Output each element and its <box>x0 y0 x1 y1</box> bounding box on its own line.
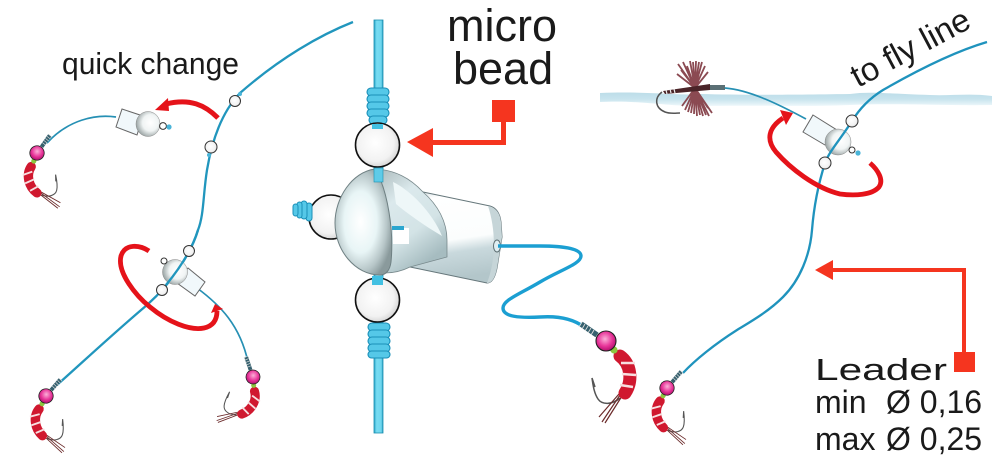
to fly line label: to fly line <box>844 0 976 94</box>
left rig main line <box>57 22 353 385</box>
quick change label: quick change <box>62 46 239 81</box>
nymph fly: top left <box>12 133 75 216</box>
nymph fly: right <box>643 370 701 451</box>
leader arrow <box>815 260 975 372</box>
red rotation arrow right <box>770 110 881 195</box>
quick change red arrow <box>155 98 218 118</box>
micro beads <box>309 123 400 322</box>
leader specification text: max <box>815 421 875 457</box>
small beads on left line <box>205 92 242 157</box>
leader specification text: min <box>815 384 867 420</box>
lower left rig <box>156 230 248 362</box>
nymph fly: lower left <box>22 378 80 459</box>
red rotation arrow left <box>120 246 223 329</box>
micro bead label: bead <box>453 43 553 94</box>
dry fly <box>657 61 725 116</box>
leader specification text <box>815 352 982 457</box>
right main leader <box>683 42 987 373</box>
leader specification text: Ø 0,25 <box>886 421 982 457</box>
right rig indicator <box>803 115 861 156</box>
side coil <box>293 201 312 221</box>
central line with coils <box>367 20 390 433</box>
water surface <box>600 93 992 106</box>
right rig: line from fly <box>725 88 806 119</box>
nymph fly: lower middle <box>203 355 278 435</box>
leader specification text: Ø 0,16 <box>886 384 982 420</box>
central nymph fly <box>579 322 636 423</box>
indicator body <box>335 168 502 283</box>
micro bead label <box>447 0 557 94</box>
leader specification text: Leader <box>815 352 947 387</box>
right rig beads <box>819 115 858 169</box>
red arrow to micro bead <box>407 100 515 157</box>
left top detached rig <box>47 109 172 143</box>
blue leader loop <box>498 246 584 327</box>
micro bead label: micro <box>447 0 557 51</box>
